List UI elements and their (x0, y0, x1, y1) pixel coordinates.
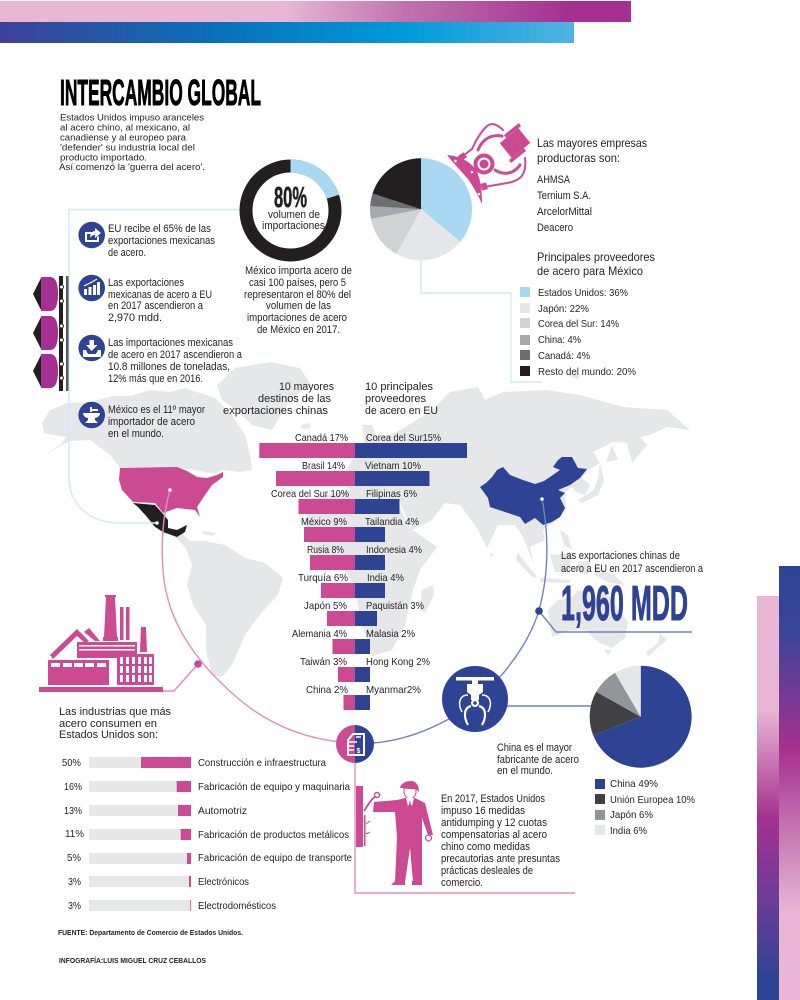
percent labels: 3% (68, 876, 81, 888)
industry labels: Fabricación de equipo de transporte (198, 852, 352, 864)
text: imports 10.8 million tons (108, 337, 243, 385)
percent labels: 50% (62, 757, 81, 769)
percent labels: 3% (68, 900, 81, 912)
left labels (271, 432, 349, 696)
highlighted country: China (480, 457, 587, 525)
heading: top destinations of Chinese exports (223, 381, 334, 417)
left labels: Brasil 14% (302, 460, 345, 472)
top decorative band: blue (0, 22, 574, 43)
pie chart: world steel makers (590, 666, 692, 768)
industry labels: Electrodomésticos (198, 900, 276, 912)
right labels: Paquistán 3% (366, 600, 424, 612)
intro text: al acero chino, al mexicano, al (60, 122, 190, 134)
heading: top suppliers to US: 10 principales (365, 381, 434, 393)
right labels: India 4% (367, 572, 404, 584)
legend: world steel makers: China 49% (610, 778, 658, 790)
left labels: Corea del Sur 10% (271, 488, 349, 500)
text: China largest maker: China es el mayor (497, 742, 572, 754)
text block: antidumping measures: comercio. (441, 877, 483, 889)
legend: suppliers to Mexico: Corea del Sur: 14% (538, 318, 619, 330)
text: Mexico 11th importer: en el mundo. (108, 428, 164, 440)
heading: US steel consuming industries: Estados Unidos son: (59, 729, 158, 741)
callout: China exports to US: acero a EU en 2017 ascendieron a (561, 563, 704, 575)
intro text: producto importado. (60, 152, 147, 164)
percent labels: 11% (65, 828, 84, 840)
infographic canvas: INTERCAMBIO GLOBAL (60, 72, 261, 113)
icon: customs document: $ (356, 748, 360, 755)
legend: suppliers to Mexico: Canadá: 4% (538, 350, 590, 362)
percent labels: 16% (64, 781, 82, 793)
source note: FUENTE: Departamento de Comercio de Estados Unidos. (58, 928, 243, 937)
legend: suppliers to Mexico: Principales proveedores (537, 250, 655, 264)
text block: largest producers: Ternium S.A. (537, 190, 591, 202)
heading: top suppliers to US (365, 381, 438, 417)
legend: suppliers to Mexico: Estados Unidos: 36% (538, 287, 628, 299)
icon: export share (78, 222, 105, 248)
text: imports 10.8 million tons: de acero en 2017 ascendieron a (108, 349, 243, 361)
world map (42, 362, 690, 677)
left labels: Japón 5% (304, 600, 347, 612)
right labels: Filipinas 6% (366, 488, 417, 500)
text block: Mexico imports: de México en 2017. (257, 324, 340, 336)
text block: Mexico imports: representaron el 80% del (244, 289, 351, 301)
heading: US steel consuming industries: acero consumen en (59, 718, 157, 730)
text: exports 2,970 mdd: Las exportaciones (108, 277, 184, 289)
text block: largest producers: Las mayores empresas (537, 136, 647, 150)
intro text: canadiense y al europeo para (60, 132, 187, 144)
industry labels: Electrónicos (198, 876, 249, 888)
text block: largest producers: productoras son: (537, 151, 620, 165)
text: EU receives 65%: EU recibe el 65% de las (108, 223, 211, 235)
right labels: Indonesia 4% (366, 544, 422, 556)
icon: robotic claw (442, 666, 508, 732)
icon: bar chart growth (78, 275, 105, 301)
legend: world steel makers: Unión Europea 10% (610, 794, 695, 806)
text: exports 2,970 mdd: 2,970 mdd. (108, 312, 162, 324)
intro text: Estados Unidos impuso aranceles (60, 112, 204, 124)
connector: blue arc China to document icon (373, 499, 692, 743)
heading: US steel consuming industries (59, 706, 171, 741)
left labels: Taiwán 3% (300, 656, 347, 668)
heading: top destinations of Chinese exports: destinos de las (258, 393, 331, 405)
connector dots (155, 488, 544, 668)
icon: customs document (336, 725, 374, 763)
text block: antidumping measures: antidumping y 12 cuotas (441, 817, 547, 829)
callout: China exports to US: Las exportaciones chinas de (561, 550, 680, 562)
text: imports 10.8 million tons: Las importaciones mexicanas (108, 337, 233, 349)
highlighted country: Mexico (133, 503, 187, 537)
icon: steel robot arm (447, 123, 530, 204)
text: China largest maker: en el mundo. (497, 765, 553, 777)
bar tracks (89, 757, 191, 911)
left labels: Rusia 8% (307, 544, 344, 556)
credit: INFOGRAFÍA:LUIS MIGUEL CRUZ CEBALLOS (59, 956, 206, 965)
text: Mexico 11th importer: importador de acero (108, 416, 195, 428)
text block: antidumping measures: compensatorias al acero (441, 829, 547, 841)
text block: antidumping measures: impuso 16 medidas (441, 805, 525, 817)
text: Mexico 11th importer: México es el 11º mayor (108, 404, 205, 416)
text block: largest producers: Deacero (537, 222, 573, 234)
text: exports 2,970 mdd (108, 277, 212, 324)
left labels: Canadá 17% (295, 432, 348, 444)
right labels: Myanmar2% (366, 684, 421, 696)
industry labels (198, 757, 352, 912)
right labels: Hong Kong 2% (366, 656, 430, 668)
heading: top suppliers to US: de acero en EU (365, 405, 438, 417)
connector: left panel outline (69, 210, 240, 523)
industry labels: Fabricación de equipo y maquinaria (198, 781, 350, 793)
legend: world steel makers: India 6% (610, 825, 647, 837)
icon: import download tray (78, 335, 105, 361)
text block: Mexico imports (244, 265, 352, 336)
legend: world steel makers (595, 778, 695, 837)
top decorative band: pink (0, 1, 631, 22)
text: imports 10.8 million tons: 12% más que en 2016. (108, 373, 203, 385)
diverging bar chart: China exports vs US suppliers (259, 432, 467, 710)
heading: top destinations of Chinese exports: exportaciones chinas (223, 405, 329, 417)
legend: suppliers to Mexico: China: 4% (538, 334, 581, 346)
right bars (355, 443, 467, 710)
right decorative column: blue (779, 566, 800, 1000)
text block: Mexico imports: México importa acero de (245, 265, 352, 277)
text: EU receives 65%: exportaciones mexicanas (108, 235, 215, 247)
right labels: Malasia 2% (366, 628, 415, 640)
donut chart: 80% import volume: volumen de (268, 209, 320, 221)
icon: man inspecting steel (356, 781, 433, 885)
text: China largest maker: fabricante de acero (497, 754, 579, 766)
pie chart: suppliers to Mexico (370, 158, 472, 260)
connector: pink arc USA to document icon (162, 490, 575, 893)
left labels: Turquía 6% (298, 572, 348, 584)
text block: antidumping measures: precautorias ante presuntas (441, 853, 560, 865)
text: exports 2,970 mdd: mexicanas de acero a EU (108, 289, 212, 301)
icon: anvil (78, 402, 105, 428)
legend: suppliers to Mexico: de acero para México (537, 264, 643, 278)
intro text: Así comenzó la 'guerra del acero'. (59, 162, 205, 173)
text: EU receives 65% (108, 223, 215, 259)
right labels (365, 432, 441, 696)
legend: suppliers to Mexico: Japón: 22% (538, 303, 589, 315)
industry labels: Fabricación de productos metálicos (198, 829, 349, 841)
text block: largest producers: ArcelorMittal (537, 206, 592, 218)
left labels: Alemania 4% (292, 628, 347, 640)
bar chart: US industries (62, 757, 352, 912)
left labels: México 9% (301, 516, 347, 528)
percent labels: 13% (64, 805, 82, 817)
legend: world steel makers: Japón 6% (610, 809, 653, 821)
intro text: 'defender' su industria local del (60, 142, 195, 154)
left labels: China 2% (306, 684, 348, 696)
decoration: steel machines on left edge (33, 276, 68, 391)
donut chart: 80% import volume: 80% (274, 182, 307, 214)
text block: antidumping measures (441, 793, 560, 889)
text block: Mexico imports: volumen de las (266, 300, 331, 312)
industry labels: Construcción e infraestructura (198, 757, 326, 769)
intro text (59, 112, 205, 173)
text block: Mexico imports: casi 100 países, pero 5 (249, 277, 346, 289)
left bars (259, 443, 355, 710)
donut chart: 80% import volume (246, 166, 335, 255)
bar values (141, 757, 191, 911)
right labels: Tailandia 4% (365, 516, 419, 528)
heading: US steel consuming industries: Las industrias que más (59, 706, 171, 718)
percent labels (62, 757, 84, 912)
text: exports 2,970 mdd: en 2017 ascendieron a (108, 300, 204, 312)
right labels: Corea del Sur15% (366, 432, 441, 444)
text block: antidumping measures: prácticas desleales de (441, 865, 533, 877)
text block: antidumping measures: chino como medidas (441, 841, 530, 853)
text: Mexico 11th importer (108, 404, 205, 440)
legend: suppliers to Mexico: Resto del mundo: 20% (538, 366, 636, 378)
text block: antidumping measures: En 2017, Estados Unidos (441, 793, 545, 805)
callout: China exports to US (561, 550, 704, 631)
legend: suppliers to Mexico (520, 250, 655, 378)
text block: largest producers (537, 136, 647, 234)
text: EU receives 65%: de acero. (108, 247, 146, 259)
donut chart: 80% import volume: importaciones (262, 220, 325, 232)
text block: Mexico imports: importaciones de acero (247, 312, 347, 324)
heading: top destinations of Chinese exports: 10 mayores (279, 381, 334, 393)
connector: pie to legend (421, 260, 542, 382)
text: China largest maker (497, 742, 579, 777)
highlighted country: United States (119, 467, 223, 517)
right labels: Vietnam 10% (365, 460, 421, 472)
icon: factory (39, 595, 163, 692)
industry labels: Automotriz (198, 805, 247, 817)
heading: top suppliers to US: proveedores (365, 393, 426, 405)
text block: largest producers: AHMSA (537, 174, 571, 186)
text: imports 10.8 million tons: 10.8 millones de toneladas, (108, 361, 230, 373)
right decorative column: pink (757, 596, 779, 1000)
percent labels: 5% (67, 852, 81, 864)
